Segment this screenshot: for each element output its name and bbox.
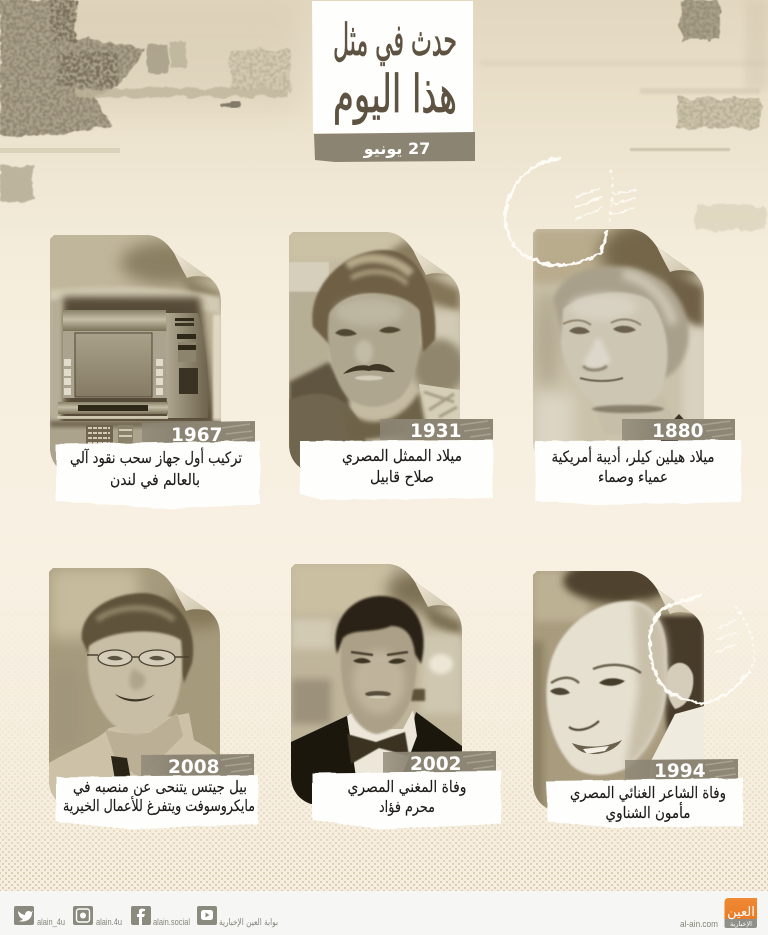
title line 2: هذا اليوم xyxy=(333,65,457,125)
icon: facebook xyxy=(131,906,151,925)
year: 1931 xyxy=(410,421,462,442)
description: وفاة الشاعر الغنائي المصري xyxy=(570,784,726,803)
year band xyxy=(142,421,255,443)
card: 2008 Bill Gates xyxy=(49,568,258,829)
handle: twitter: alain_4u xyxy=(37,917,65,928)
newspaper texture: top right xyxy=(480,0,768,230)
year: 1994 xyxy=(654,761,706,782)
description line 2: مأمون الشناوي xyxy=(606,802,690,823)
card: 2002 Moharram Fouad xyxy=(291,564,501,829)
text paper xyxy=(535,440,741,505)
handle: instagram: alain.4u xyxy=(96,917,122,928)
logo: العين xyxy=(727,905,755,920)
icon: instagram xyxy=(73,906,93,925)
text paper xyxy=(56,441,260,509)
year band xyxy=(141,754,254,776)
year: 1880 xyxy=(652,421,704,442)
card: 1967 ATM xyxy=(50,235,260,509)
description line 2: بالعالم في لندن xyxy=(110,471,200,490)
photo: Helen Keller xyxy=(533,229,704,452)
text paper xyxy=(312,771,501,829)
coffee stain: ring over top right card xyxy=(505,158,636,265)
website: al-ain.com xyxy=(680,919,718,930)
coffee stain: ring over lower right card xyxy=(650,595,754,703)
year: 2002 xyxy=(410,754,462,775)
description: وفاة المغني المصري xyxy=(348,778,466,797)
description: ميلاد الممثل المصري xyxy=(342,447,462,466)
page fold xyxy=(413,250,449,275)
page fold xyxy=(415,582,451,607)
description: بيل جيتس يتنحى عن منصبه في xyxy=(73,778,247,797)
year: 2008 xyxy=(168,757,220,778)
handle: facebook: alain.social xyxy=(153,917,190,928)
photo: Mamoun Al-Shinnawi xyxy=(533,571,704,808)
description line 2: مايكروسوفت ويتفرغ للأعمال الخيرية xyxy=(63,796,255,816)
description: ميلاد هيلين كيلر، أديبة أمريكية xyxy=(552,446,714,466)
text paper xyxy=(300,440,493,500)
text paper xyxy=(56,775,258,829)
photo: Moharram Fouad xyxy=(291,564,462,814)
year band xyxy=(622,419,735,440)
year band xyxy=(625,759,738,780)
year band xyxy=(383,751,496,773)
title line 1: حدث في مثل xyxy=(333,15,457,66)
title white paper xyxy=(312,1,473,133)
icon: youtube xyxy=(197,906,217,925)
card: 1994 Mamoun Al-Shinnawi xyxy=(531,559,743,831)
date: 27 يونيو xyxy=(363,139,430,158)
photo: Bill Gates xyxy=(49,568,229,808)
newspaper texture: top left xyxy=(0,0,300,201)
description line 2: عمياء وصماء xyxy=(598,468,668,487)
description line 2: صلاح قابيل xyxy=(370,468,434,487)
date band xyxy=(314,132,475,162)
logo: الإخبارية xyxy=(730,920,752,928)
text paper xyxy=(546,778,743,828)
year band xyxy=(380,419,493,440)
title block xyxy=(312,1,475,162)
page fold xyxy=(173,586,209,611)
card: 1931 Salah Kabil xyxy=(289,232,493,500)
halftone band at bottom xyxy=(0,686,768,891)
card: 1880 Helen Keller xyxy=(533,219,741,505)
page fold xyxy=(174,253,210,278)
icon: twitter xyxy=(14,906,34,925)
footer xyxy=(0,891,768,935)
description: تركيب أول جهاز سحب نقود آلي xyxy=(70,447,242,468)
photo: Salah Kabil xyxy=(289,232,465,472)
year: 1967 xyxy=(171,425,222,446)
description line 2: محرم فؤاد xyxy=(379,798,435,816)
logo xyxy=(724,898,757,928)
page fold xyxy=(657,247,693,272)
footer bar xyxy=(0,891,768,935)
page fold xyxy=(657,589,693,614)
photo: ATM machine xyxy=(50,235,221,475)
handle: youtube: بوابة العين الإخبارية xyxy=(219,918,278,928)
